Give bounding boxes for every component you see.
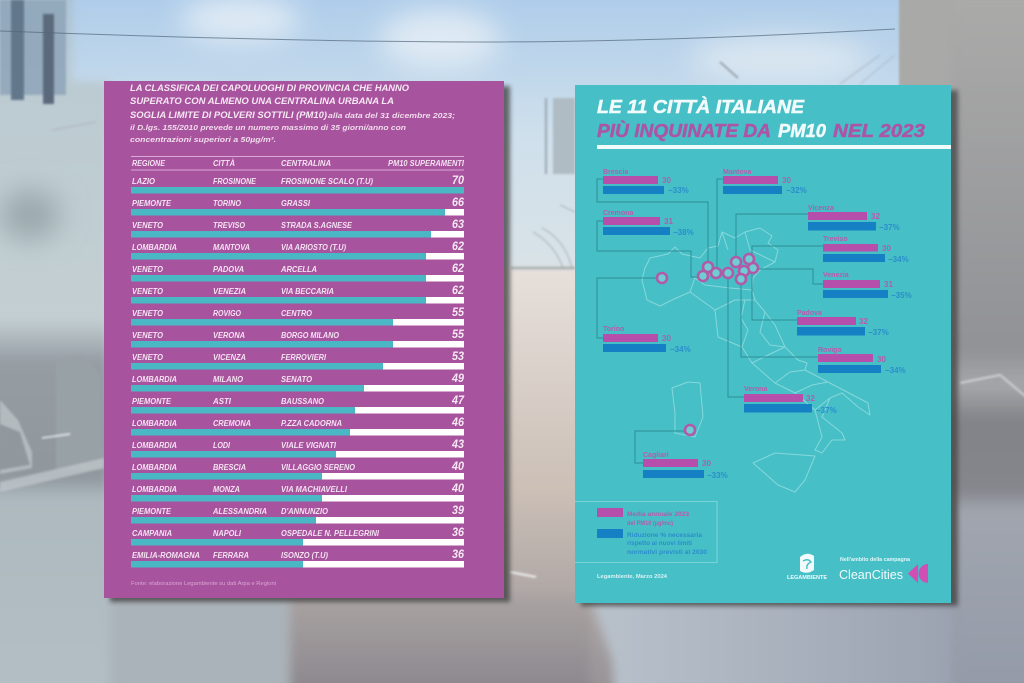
city: Mantova <box>723 169 807 195</box>
row: Venezia <box>131 285 465 304</box>
row: Asti: ASTI <box>212 397 232 406</box>
row: Milano <box>131 373 465 392</box>
legend: Media annuale 2023 <box>627 512 690 518</box>
city: Torino: −34% <box>670 345 691 354</box>
legend: normativi previsti al 2030 <box>627 550 708 556</box>
table header: CITTÀ <box>213 159 235 168</box>
row: Venezia: VENETO <box>132 287 164 296</box>
row: Lodi <box>131 439 465 458</box>
row: Alessandria: 39 <box>452 505 465 517</box>
row: Torino: GRASSI <box>281 199 311 208</box>
heading: ranking intro text: SUPERATO CON ALMENO UNA CENTRALINA URBANA LA <box>130 96 394 107</box>
row: Vicenza: VENETO <box>132 353 164 362</box>
city: Vicenza: Vicenza <box>808 205 834 212</box>
city: Brescia: Brescia <box>603 169 628 176</box>
row: Lodi: 43 <box>451 439 465 451</box>
row: Vicenza: 53 <box>452 351 465 363</box>
row: Treviso <box>131 219 465 238</box>
city markers <box>657 254 758 435</box>
row: Monza: 40 <box>451 483 465 495</box>
row: Treviso: VENETO <box>132 221 164 230</box>
row: Brescia: BRESCIA <box>213 463 246 472</box>
row: Frosinone: FROSINONE <box>213 177 257 186</box>
legend <box>575 502 717 562</box>
row: Napoli: CAMPANIA <box>132 529 172 538</box>
row: Torino <box>131 197 465 216</box>
row: Alessandria <box>131 505 465 524</box>
row: Frosinone: FROSINONE SCALO (T.U) <box>281 177 373 186</box>
row: Torino: PIEMONTE <box>132 199 172 208</box>
row: Rovigo <box>131 307 465 326</box>
row: Milano: LOMBARDIA <box>132 375 177 384</box>
row: Napoli: OSPEDALE N. PELLEGRINI <box>281 529 380 538</box>
row: Asti <box>131 395 465 414</box>
legend: del PM10 (µg/mc) <box>627 521 673 527</box>
row: Treviso: STRADA S.AGNESE <box>281 221 353 230</box>
row: Torino: 66 <box>452 197 465 209</box>
row: Verona: 55 <box>452 329 465 341</box>
heading: ranking intro text: concentrazioni superiori a 50µg/m³. <box>130 135 276 144</box>
city: Mantova: Mantova <box>723 169 752 176</box>
city: Venezia: Venezia <box>823 272 849 279</box>
row: Venezia: VIA BECCARIA <box>281 287 334 296</box>
row: Monza: MONZA <box>213 485 240 494</box>
panel: ranking of provincial capitals <box>104 81 504 598</box>
row: Frosinone: LAZIO <box>132 177 156 186</box>
row: Mantova: VIA ARIOSTO (T.U) <box>281 243 346 252</box>
row: Milano: 49 <box>451 373 465 385</box>
row: Torino: TORINO <box>213 199 242 208</box>
row: Lodi: LODI <box>213 441 231 450</box>
row: Milano: MILANO <box>213 375 244 384</box>
row: Asti: BAUSSANO <box>281 397 325 406</box>
connector lines <box>597 179 823 463</box>
panel shadow: left <box>110 86 510 602</box>
row: Frosinone <box>131 175 465 194</box>
city: Rovigo: 30 <box>877 355 886 364</box>
city: Torino: 30 <box>662 334 671 343</box>
row: Mantova: LOMBARDIA <box>132 243 177 252</box>
city: Padova: −37% <box>868 328 889 337</box>
row: Alessandria: D'ANNUNZIO <box>281 507 329 516</box>
city: Venezia: 31 <box>884 280 893 289</box>
row: Padova: PADOVA <box>213 265 244 274</box>
row: Rovigo: ROVIGO <box>213 309 242 318</box>
row: Padova: 62 <box>452 263 465 275</box>
city: Mantova: 30 <box>782 176 791 185</box>
row: Verona: VERONA <box>213 331 245 340</box>
row: Mantova: 62 <box>452 241 465 253</box>
city: Brescia <box>603 169 689 195</box>
row: Padova: ARCELLA <box>280 265 317 274</box>
heading: ranking intro text: il D.lgs. 155/2010 prevede un numero massimo di 35 giorni/anno con <box>130 123 406 132</box>
map of Italy <box>642 228 870 492</box>
row: Padova: VENETO <box>132 265 164 274</box>
row: Rovigo: VENETO <box>132 309 164 318</box>
city: Cagliari: 30 <box>702 459 711 468</box>
row: Ferrara: EMILIA-ROMAGNA <box>132 551 200 560</box>
row: Brescia: 40 <box>451 461 465 473</box>
panel: map of the 11 cities <box>575 85 951 603</box>
row: Rovigo: 55 <box>452 307 465 319</box>
row: Ferrara: ISONZO (T.U) <box>281 551 328 560</box>
heading: ranking intro text <box>130 83 456 144</box>
row: Vicenza: VICENZA <box>213 353 246 362</box>
logo: Clean Cities campaign: CleanCities <box>839 567 903 582</box>
row: Lodi: VIALE VIGNATI <box>281 441 337 450</box>
city: Rovigo <box>818 347 906 375</box>
row: Cremona: 46 <box>451 417 465 429</box>
table header: CENTRALINA <box>281 159 331 168</box>
city: Brescia: −33% <box>668 186 689 195</box>
road surface, bottom <box>90 595 1024 683</box>
row: Lodi: LOMBARDIA <box>132 441 177 450</box>
city: Treviso: Treviso <box>823 236 848 243</box>
city: Vicenza: 32 <box>871 212 880 221</box>
heading: ranking intro text: SOGLIA LIMITE DI POLVERI SOTTILI (PM10) <box>130 110 327 121</box>
city: Torino <box>603 326 691 354</box>
row: Napoli: 36 <box>452 527 465 539</box>
row: Verona: VENETO <box>132 331 164 340</box>
row: Brescia: VILLAGGIO SERENO <box>281 463 356 472</box>
logo: Legambiente: LEGAMBIENTE <box>787 575 827 581</box>
row: Ferrara: FERRARA <box>213 551 249 560</box>
city: Cagliari: −33% <box>707 471 728 480</box>
city: Cremona: 31 <box>664 217 673 226</box>
heading: ranking intro text: alla data del 31 dicembre 2023; <box>328 111 456 120</box>
city: Cremona: −38% <box>673 228 694 237</box>
row: Brescia <box>131 461 465 480</box>
city: Cagliari <box>643 452 728 480</box>
row: Cremona: CREMONA <box>213 419 251 428</box>
table header <box>132 159 465 168</box>
row: Vicenza <box>131 351 465 370</box>
right column: wall and road <box>899 0 1024 683</box>
title: LE 11 CITTÀ ITALIANE <box>597 96 805 117</box>
row: Monza: LOMBARDIA <box>132 485 177 494</box>
city: Treviso: 30 <box>882 244 891 253</box>
city: Rovigo: −34% <box>885 366 906 375</box>
row: Vicenza: FERROVIERI <box>281 353 327 362</box>
title: PM10 <box>778 120 827 141</box>
row: Frosinone: 70 <box>452 175 465 187</box>
city: Padova: Padova <box>797 310 822 317</box>
legend: rispetto ai nuovi limiti <box>627 541 692 547</box>
row: Mantova: MANTOVA <box>213 243 250 252</box>
title: NEL 2023 <box>833 120 926 141</box>
row: Brescia: LOMBARDIA <box>132 463 177 472</box>
row: Asti: PIEMONTE <box>132 397 172 406</box>
row: Napoli <box>131 527 465 546</box>
row: Venezia: VENEZIA <box>213 287 246 296</box>
row: Mantova <box>131 241 465 260</box>
city: Venezia: −35% <box>891 291 912 300</box>
row: Treviso: 63 <box>452 219 465 231</box>
table header: PM10 SUPERAMENTI <box>388 159 465 168</box>
city: Vicenza <box>808 205 900 232</box>
legend: Riduzione % necessaria <box>627 533 703 539</box>
city: Verona <box>744 386 837 415</box>
row: Padova <box>131 263 465 282</box>
title: PIÙ INQUINATE DA <box>597 120 771 141</box>
row: Monza: VIA MACHIAVELLI <box>281 485 348 494</box>
row: Venezia: 62 <box>452 285 465 297</box>
city: Cremona <box>603 210 694 237</box>
left column: buildings, fog and cars <box>0 0 110 683</box>
city: Verona: −37% <box>816 406 837 415</box>
row: Cremona <box>131 417 465 436</box>
row: Verona <box>131 329 465 348</box>
panel shadow: right <box>581 90 958 606</box>
city: Rovigo: Rovigo <box>818 347 842 354</box>
row: Treviso: TREVISO <box>213 221 246 230</box>
row: Cremona: P.ZZA CADORNA <box>281 419 342 428</box>
row: Milano: SENATO <box>281 375 313 384</box>
row: Monza <box>131 483 465 502</box>
row: Alessandria: ALESSANDRIA <box>212 507 267 516</box>
row: Ferrara: 36 <box>452 549 465 561</box>
city: Cremona: Cremona <box>603 210 633 217</box>
source note: Fonte: elaborazione Legambiente su dati Arpa e Regioni <box>131 581 276 587</box>
credit: Legambiente, Marzo 2024 <box>597 574 668 580</box>
city: Treviso <box>823 236 909 264</box>
city: Verona: 32 <box>806 394 815 403</box>
city: Padova <box>797 310 889 337</box>
city: Brescia: 30 <box>662 176 671 185</box>
city: Verona: Verona <box>744 386 767 393</box>
logo: Legambiente <box>787 554 827 581</box>
city: Mantova: −32% <box>786 186 807 195</box>
city: Padova: 32 <box>859 317 868 326</box>
heading: ranking intro text: LA CLASSIFICA DEI CAPOLUOGHI DI PROVINCIA CHE HANNO <box>130 83 410 94</box>
table header: REGIONE <box>132 159 166 168</box>
row: Cremona: LOMBARDIA <box>132 419 177 428</box>
logo: Clean Cities campaign: Nell'ambito della campagna <box>840 557 910 563</box>
city: Cagliari: Cagliari <box>643 452 669 459</box>
city: Treviso: −34% <box>888 255 909 264</box>
row: Ferrara <box>131 549 465 568</box>
city: Vicenza: −37% <box>879 223 900 232</box>
row: Alessandria: PIEMONTE <box>132 507 172 516</box>
row: Verona: BORGO MILANO <box>281 331 340 340</box>
city: Venezia <box>823 272 912 300</box>
city: Torino: Torino <box>603 326 624 333</box>
row: Rovigo: CENTRO <box>281 309 313 318</box>
row: Napoli: NAPOLI <box>213 529 242 538</box>
title <box>597 96 926 141</box>
row: Asti: 47 <box>451 395 465 407</box>
logo: Clean Cities campaign <box>839 557 928 583</box>
